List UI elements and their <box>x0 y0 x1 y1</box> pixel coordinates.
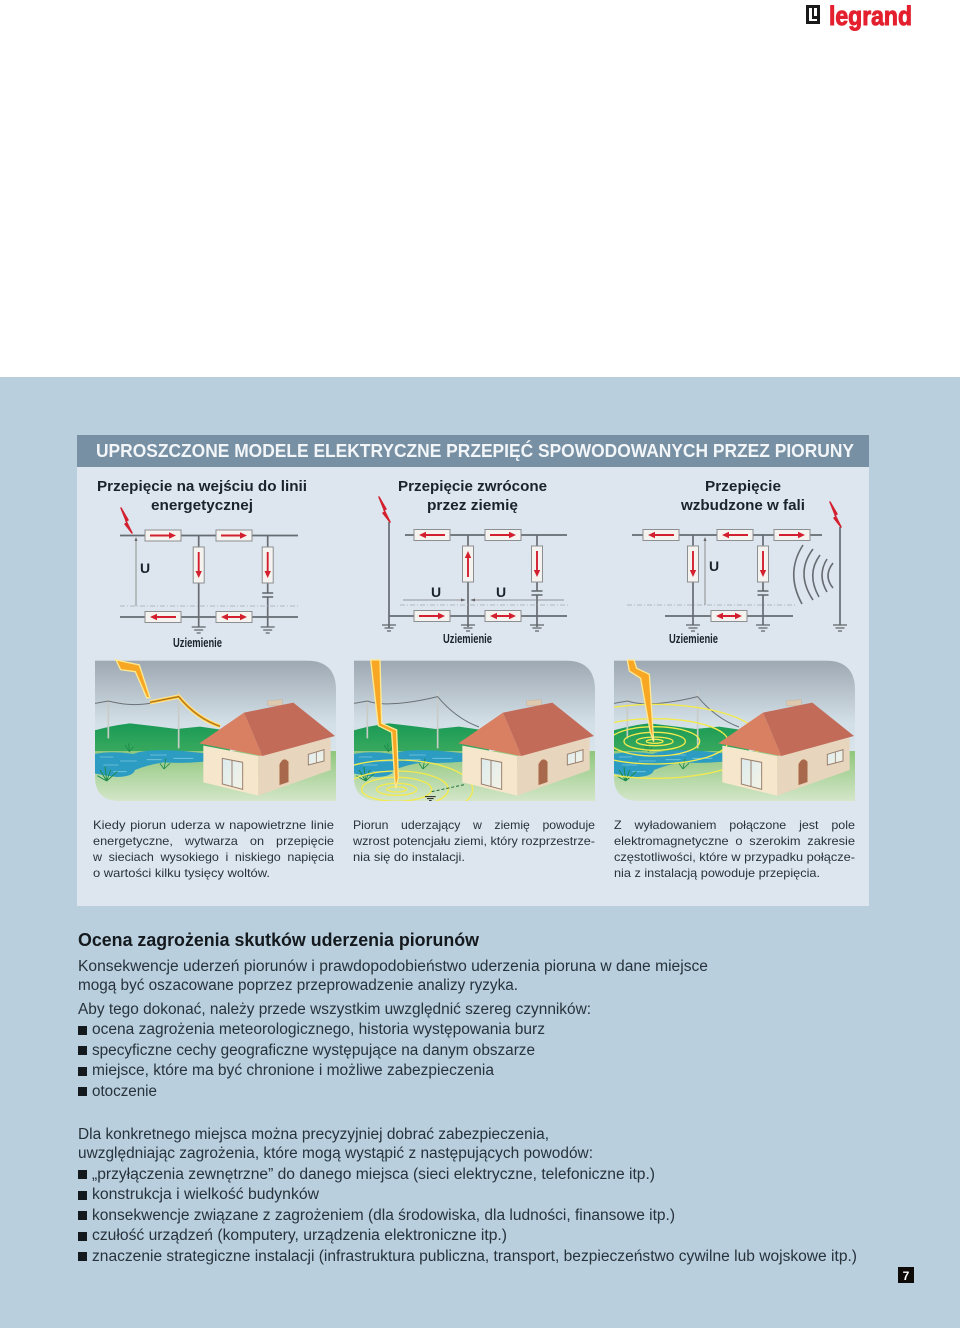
column heading 1: energetycznej <box>151 497 253 514</box>
caption 3: nia z instalacją powoduje przepięcia. <box>614 866 820 880</box>
column heading 2 <box>398 478 547 514</box>
column heading 2: przez ziemię <box>427 497 518 514</box>
logo: legrand <box>806 1 912 31</box>
column heading 3 <box>680 478 805 514</box>
bullet list 1: miejsce, które ma być chronione i możliwe zabezpieczenia <box>92 1062 494 1079</box>
intro text: Konsekwencje uderzeń piorunów i prawdopodobieństwo uderzenia pioruna w dane miejsce <box>78 958 708 975</box>
page number <box>898 1267 914 1283</box>
circuit diagram 2 <box>379 497 570 646</box>
caption 1: o wartości kilku tysięcy woltów. <box>93 866 270 880</box>
column heading 2: Przepięcie zwrócone <box>398 478 547 495</box>
circuit diagram 1: U <box>140 560 150 576</box>
heading band: UPROSZCZONE MODELE ELEKTRYCZNE PRZEPIĘĆ SPOWODOWANYCH PRZEZ PIORUNY <box>96 440 854 461</box>
caption 1: energetyczne, wytwarza on przepięcie <box>93 834 334 848</box>
column heading 1: Przepięcie na wejściu do linii <box>97 478 307 495</box>
heading band <box>77 435 869 467</box>
caption 2: Piorun uderzający w ziemię powoduje <box>353 818 595 832</box>
page number: 7 <box>903 1269 910 1283</box>
second text block: Dla konkretnego miejsca można precyzyjniej dobrać zabezpieczenia, <box>78 1126 549 1143</box>
circuit diagram 3 <box>627 502 847 646</box>
section heading: Ocena zagrożenia skutków uderzenia piorunów <box>78 930 480 950</box>
bullet list 2 <box>78 1166 857 1265</box>
page background panel <box>0 377 960 1328</box>
circuit diagram 3: U <box>709 558 719 574</box>
caption 1: w sieciach wysokiego i niskiego napięcia <box>92 850 334 864</box>
caption 3 <box>614 818 855 880</box>
caption 1 <box>92 818 334 880</box>
illustration 3: electromagnetic wave <box>614 659 855 801</box>
caption 2 <box>352 818 595 864</box>
bullet list 1: ocena zagrożenia meteorologicznego, historia występowania burz <box>92 1021 545 1038</box>
caption 2: nia się do instalacji. <box>353 850 465 864</box>
second text block: uwzględniając zagrożenia, które mogą wystąpić z następujących powodów: <box>78 1145 593 1162</box>
circuit diagram 3: Uziemienie <box>669 631 718 646</box>
column heading 3: Przepięcie <box>705 478 781 495</box>
bullet list 2: czułość urządzeń (komputery, urządzenia elektroniczne itp.) <box>92 1227 507 1244</box>
bullet list 2: konstrukcja i wielkość budynków <box>92 1186 320 1203</box>
bullet list 1: specyficzne cechy geograficzne występujące na danym obszarze <box>92 1042 535 1059</box>
intro text <box>78 958 708 1018</box>
second text block <box>78 1126 593 1162</box>
bullet list 1 <box>78 1021 545 1100</box>
caption 1: Kiedy piorun uderza w napowietrzne linie <box>93 818 334 832</box>
illustration 1: lightning strikes power line <box>90 655 343 805</box>
bullet list 2: konsekwencje związane z zagrożeniem (dla środowiska, dla ludności, finansowe itp.) <box>92 1207 675 1224</box>
circuit diagram 2: U <box>496 584 506 600</box>
column heading 1 <box>97 478 307 514</box>
intro text: mogą być oszacowane poprzez przeprowadzenie analizy ryzyka. <box>78 977 518 994</box>
circuit diagram 1: Uziemienie <box>173 635 222 650</box>
bullet list 1: otoczenie <box>92 1083 157 1100</box>
column heading 3: wzbudzone w fali <box>680 497 805 514</box>
circuit diagram 2: U <box>431 584 441 600</box>
illustration 2: lightning strikes ground <box>354 659 595 801</box>
caption 2: wzrost potencjału ziemi, który rozprzestrze- <box>352 834 595 848</box>
bullet list 2: znaczenie strategiczne instalacji (infrastruktura publiczna, transport, bezpieczeństwo cywilne lub wojskowe itp.) <box>92 1248 857 1265</box>
circuit diagram 1 <box>120 508 300 650</box>
caption 3: Z wyładowaniem połączone jest pole <box>614 818 855 832</box>
caption 3: częstotliwości, które w przypadku połącze- <box>614 850 855 864</box>
circuit diagram 2: Uziemienie <box>443 631 492 646</box>
bullet list 2: „przyłączenia zewnętrzne” do danego miejsca (sieci elektryczne, telefoniczne itp.) <box>92 1166 655 1183</box>
logo: legrand: legrand <box>829 1 912 31</box>
caption 3: elektromagnetyczne o szerokim zakresie <box>614 834 855 848</box>
intro text: Aby tego dokonać, należy przede wszystkim uwzględnić szereg czynników: <box>78 1001 591 1018</box>
panel: electrical models <box>77 435 869 906</box>
